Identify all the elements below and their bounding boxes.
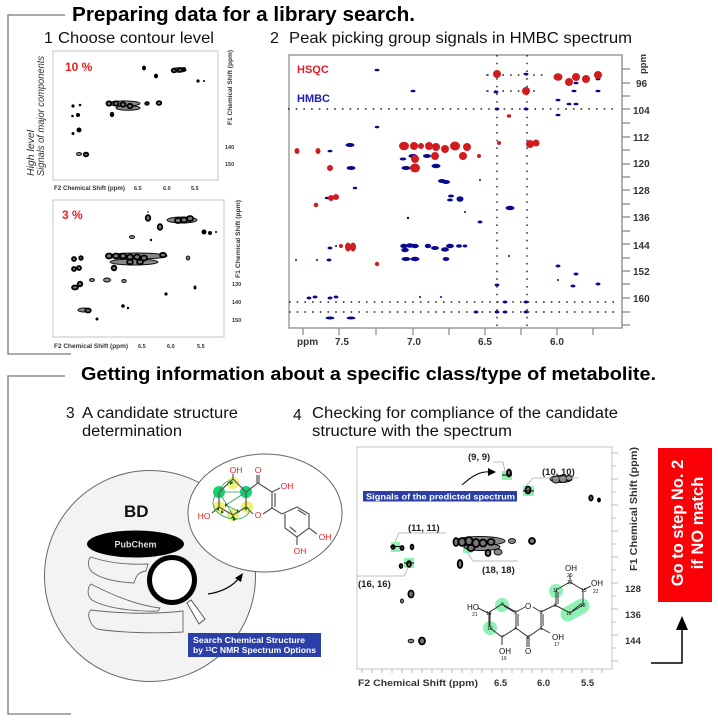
axis labels: 3 percent: 6.0	[167, 344, 175, 350]
heading: step 3: determination	[82, 423, 182, 440]
database top: PubChem: PubChem	[114, 540, 157, 550]
heading: step 4: Checking for compliance of the candidate	[312, 405, 618, 422]
structure with numbered carbons	[467, 564, 603, 662]
structure atom labels: 8	[554, 603, 557, 609]
atom highlights	[213, 477, 253, 521]
callout: signals of the predicted spectrum: Signals of the predicted spectrum	[366, 492, 515, 502]
predicted signal highlights	[391, 471, 534, 568]
label: 3 percent: 3 %	[62, 208, 83, 222]
peak labels and connectors: (9, 9)	[468, 452, 490, 463]
HSQC peaks	[294, 70, 602, 266]
title: getting information: Getting information about a specific class/type of metabolite.	[81, 363, 656, 384]
axis ticks	[362, 453, 618, 673]
structure bonds	[478, 574, 591, 647]
structure atom labels: 21	[472, 612, 478, 618]
structure atom labels: HO	[467, 603, 479, 612]
side note: high level signals: Signals of major components	[35, 55, 47, 176]
axis labels: 6.0	[537, 678, 550, 689]
callout: search chemical structure: Search Chemical Structure	[193, 636, 306, 645]
contour peaks: 3 percent	[72, 211, 217, 320]
axis labels: 10 percent: 6.5	[134, 186, 142, 192]
HMBC peaks	[295, 69, 600, 320]
axis labels: 3 percent: 6.5	[138, 344, 146, 350]
callout: go to step 2	[658, 448, 712, 602]
structure atom labels	[467, 564, 603, 662]
database top: PubChem	[87, 530, 184, 558]
axis labels: 6.5	[494, 678, 508, 689]
peak labels and connectors	[357, 452, 578, 590]
callout: search chemical structure: C NMR Spectrum Options	[211, 646, 317, 655]
title: preparing data: Preparing data for a library search.	[72, 4, 415, 26]
axis labels: 10 percent: 140	[225, 145, 234, 151]
structure atom labels: 16	[566, 611, 572, 617]
axis labels: 3 percent: 150	[232, 318, 241, 324]
axis labels: 136	[633, 213, 650, 224]
structure atom labels: OH	[565, 564, 577, 573]
chart: HSQC and HMBC peak picking spectrum	[288, 54, 650, 348]
peak labels and connectors: (18, 18)	[482, 565, 515, 576]
axis labels: 112	[633, 133, 650, 144]
axis labels	[297, 54, 650, 348]
axis labels: 3 percent: 130	[232, 282, 241, 288]
magnifying glass	[150, 558, 205, 624]
callout: search chemical structure: by	[193, 646, 202, 655]
peak labels and connectors: (10, 10)	[542, 467, 575, 478]
structure atom labels: 17	[554, 642, 560, 648]
structure atom labels: 7	[501, 635, 504, 641]
structure atom labels: 1	[540, 626, 543, 632]
structure labels: HO	[198, 511, 211, 521]
axis labels: 3 percent	[54, 200, 242, 350]
side note: high level signals	[25, 55, 47, 176]
arrow: to signal	[462, 468, 496, 485]
arrow: to structure	[208, 573, 243, 594]
side note: high level signals: High level	[25, 129, 37, 176]
label: 10 percent: 10 %	[65, 60, 93, 74]
axis labels: 144	[625, 636, 642, 647]
axis labels: F1 Chemical Shift (ppm)	[629, 447, 640, 571]
heading: step 3	[66, 405, 238, 440]
axis labels: 96	[636, 79, 648, 90]
axis labels: 10 percent: 6.0	[163, 186, 171, 192]
callout: go to step 2: Go to step No. 2	[669, 460, 687, 586]
contour peaks: 10 percent	[71, 66, 205, 156]
structure labels: O	[255, 465, 262, 475]
heading: step 4: structure with the spectrum	[312, 423, 512, 440]
section bracket: preparing data	[8, 15, 71, 354]
axis labels: ppm	[638, 54, 649, 74]
structure atom labels: 15	[581, 588, 587, 594]
structure labels: OH	[230, 465, 242, 475]
panel: database search	[44, 454, 342, 682]
structure atom labels: OH	[591, 579, 603, 588]
axis labels: 152	[633, 267, 650, 278]
heading: step 3: A candidate structure	[82, 405, 238, 422]
magnified structure bubble	[188, 454, 342, 572]
axis labels: 3 percent: F2 Chemical Shift (ppm)	[54, 344, 128, 350]
structure labels	[198, 465, 331, 556]
axis labels: 160	[633, 294, 650, 305]
axis labels: 6.5	[478, 337, 492, 348]
legend: HSQC: HSQC	[297, 64, 329, 76]
axis labels: 6.0	[550, 337, 564, 348]
structure atom labels: 2	[540, 610, 543, 616]
structure atom labels: 18	[580, 603, 586, 609]
axis labels: 104	[633, 106, 650, 117]
chart: predicted spectrum comparison	[357, 447, 642, 689]
structure atom labels: O	[525, 602, 531, 611]
heading: step 2: Peak picking group signals in HMBC spectrum	[289, 30, 632, 47]
axis labels: 3 percent: 5.5	[197, 344, 205, 350]
structure atom labels: 9	[501, 602, 504, 608]
section bracket: specific class	[8, 376, 71, 714]
heading: step 3: 3	[66, 405, 75, 422]
axis labels: 128	[633, 186, 650, 197]
structure labels: OH	[281, 481, 293, 491]
heading: step 2: 2	[270, 30, 279, 47]
axis labels: F2 Chemical Shift (ppm)	[358, 678, 478, 689]
structure bonds	[212, 474, 317, 545]
axis labels: 7.0	[407, 337, 421, 348]
axis labels: 3 percent: F1 Chemical Shift (ppm)	[236, 200, 242, 278]
structure atom labels: OH	[552, 633, 564, 642]
structure atom labels: 10	[487, 626, 493, 632]
axis labels: 136	[625, 610, 641, 621]
heading: step 1: Choose contour level	[58, 30, 214, 47]
arrow: back to step 2	[651, 616, 688, 663]
heading: step 1: 1	[44, 30, 53, 47]
structure atom labels: 14	[486, 611, 492, 617]
structure atom labels: 20	[567, 573, 573, 579]
structure atom labels: 3	[527, 635, 530, 641]
structure atom labels: 11	[553, 588, 558, 594]
axis labels: 5.5	[581, 678, 595, 689]
contour peaks	[390, 470, 600, 644]
callout: search chemical structure	[188, 633, 321, 657]
peak labels and connectors: (11, 11)	[408, 523, 440, 534]
heading: step 4	[293, 405, 618, 440]
panel: 3 percent contour spectrum	[53, 200, 242, 350]
callout: go to step 2: if NO match	[689, 477, 707, 569]
axis labels: 10 percent	[54, 50, 234, 192]
database stack	[88, 557, 183, 633]
heading: step 4: 4	[293, 407, 302, 424]
axis labels: 10 percent: 5.5	[191, 186, 199, 192]
picked signal guide lines	[288, 55, 620, 328]
structure highlights	[483, 584, 582, 635]
structure labels: OH	[294, 546, 306, 556]
legend: HMBC: HMBC	[297, 93, 330, 105]
peak labels and connectors: (16, 16)	[358, 579, 391, 590]
structure labels: OH	[319, 532, 331, 542]
structure atom labels: O	[525, 647, 531, 656]
panel: 10 percent contour spectrum	[53, 50, 234, 192]
structure atom labels: 19	[501, 656, 507, 662]
structure atom labels: 4	[514, 626, 517, 632]
axis labels: 144	[633, 241, 650, 252]
callout: search chemical structure: 13	[205, 647, 212, 653]
axis labels: 10 percent: 150	[225, 162, 234, 168]
structure atom labels: 12	[567, 580, 573, 586]
structure atom labels: 22	[593, 589, 599, 595]
axis labels: 10 percent: F2 Chemical Shift (ppm)	[54, 186, 125, 192]
structure atom labels: OH	[499, 647, 511, 656]
correlation arrows	[213, 481, 249, 521]
axis labels: 120	[633, 159, 650, 170]
database circle	[44, 470, 256, 682]
axis labels: 7.5	[335, 337, 349, 348]
axis labels: 10 percent: F1 Chemical Shift (ppm)	[228, 50, 234, 125]
axis labels	[358, 447, 642, 689]
axis labels: ppm	[297, 337, 318, 348]
axis labels: 128	[625, 584, 641, 595]
axis ticks	[303, 55, 630, 335]
axis labels: 3 percent: 140	[232, 300, 241, 306]
label: BD: BD	[124, 502, 149, 521]
structure labels: O	[255, 510, 262, 520]
structure atom labels: 6	[514, 610, 517, 616]
